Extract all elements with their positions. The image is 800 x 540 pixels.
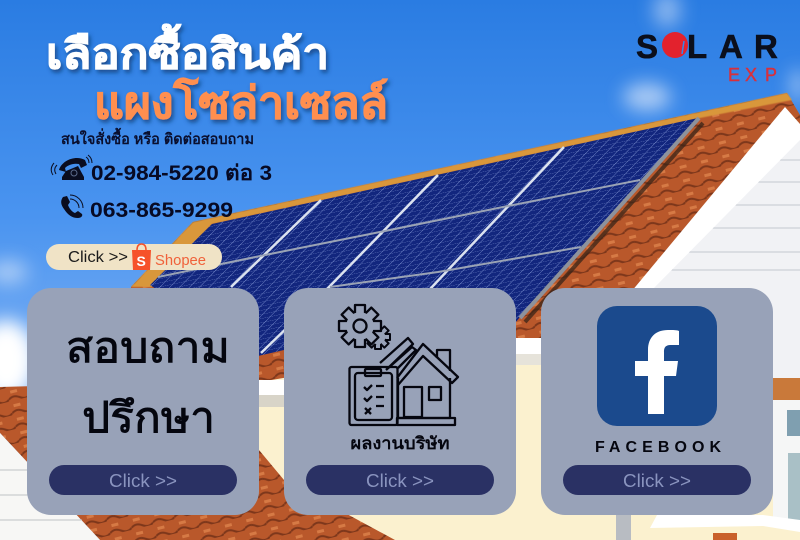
heading: consult line 1: สอบถาม <box>66 324 230 371</box>
label: company works: ผลงานบริษัท <box>350 434 450 453</box>
icon: desk telephone <box>51 155 92 180</box>
panel: company works <box>284 288 516 515</box>
logo: red sun <box>662 32 688 58</box>
phone number: mobile: 063-865-9299 <box>90 199 233 222</box>
icon: shopee bag: S <box>136 253 146 269</box>
icon: gears, clipboard and house <box>339 305 458 425</box>
panel: facebook <box>541 288 773 515</box>
phone number: landline: 02-984-5220 ต่อ 3 <box>91 162 272 185</box>
logo: solar exp: S <box>636 28 658 65</box>
title: white line: เลือกซื้อสินค้า <box>46 24 329 77</box>
shopee button: Click >> <box>68 249 128 266</box>
icon: facebook <box>597 306 717 426</box>
shopee button: Shopee <box>155 252 206 269</box>
button: click <box>563 465 751 495</box>
icon: handset <box>61 195 83 218</box>
title: orange line: แผงโซล่าเซลล์ <box>94 76 388 128</box>
logo: solar exp: EXP <box>728 65 777 85</box>
panel: consult <box>27 288 259 515</box>
button: click: Click >> <box>623 471 691 491</box>
button: click: Click >> <box>109 471 177 491</box>
logo: solar exp <box>636 28 778 85</box>
button: click <box>306 465 494 495</box>
button: click <box>49 465 237 495</box>
label: facebook: FACEBOOK <box>595 439 721 456</box>
subtitle: สนใจสั่งซื้อ หรือ ติดต่อสอบถาม <box>61 127 254 148</box>
solar panel array <box>150 118 703 356</box>
button: click: Click >> <box>366 471 434 491</box>
logo: solar exp: LAR <box>687 28 778 65</box>
heading: consult line 2: ปรึกษา <box>82 394 215 441</box>
icon: shopee bag <box>132 244 151 270</box>
clouds <box>0 0 800 400</box>
shopee button <box>46 244 222 270</box>
